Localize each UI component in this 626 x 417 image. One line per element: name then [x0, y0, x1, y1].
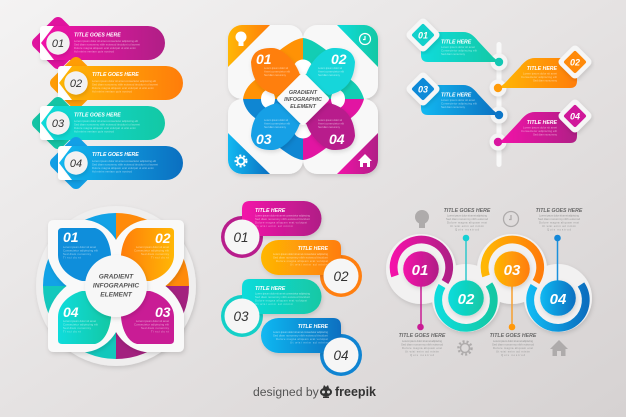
caption bottom 03: Ut wisi enim ad minim: [496, 350, 531, 354]
caption top 04: TITLE GOES HERE: [536, 208, 583, 214]
row 02: [56, 63, 183, 103]
petal labels: Consectetur adipiscing elit: [63, 322, 98, 326]
petal labels: Consectetur adipiscing elit: [134, 248, 169, 252]
flag 02: [494, 50, 587, 92]
row 04: 04: [333, 348, 349, 363]
flag 04: TITLE HERE: [527, 120, 558, 126]
row 04: [56, 143, 183, 183]
icon: home: [358, 154, 372, 167]
flag 02: Sed diam nonummy: [533, 78, 558, 82]
row 01: TITLE GOES HERE: [74, 32, 121, 38]
row 04: Sed diam nonummy nibh euismod tincidunt ut laoreet: [92, 162, 158, 166]
caption top 04: Dolore magna aliquam erat: [539, 220, 579, 224]
centre circle: [85, 255, 147, 317]
row 01: [38, 23, 165, 63]
row 02: Dolore magna aliquam erat volutpat: [276, 259, 328, 263]
row 04: Ad minim veniam quis nostrud: [92, 170, 132, 174]
icon: clock: [504, 212, 518, 226]
ring 04: [530, 235, 586, 328]
row 01: TITLE HERE: [255, 208, 286, 214]
flag 04: Consectetur adipiscing elit: [521, 129, 557, 133]
lobe labels: [256, 51, 347, 147]
lobe labels: Amet consectetur elit: [264, 122, 290, 126]
petal labels: Tincidunt: [151, 330, 169, 334]
ring 03: [485, 240, 540, 330]
row 03: 03: [52, 118, 65, 130]
row 03: Sed diam nonummy nibh euismod tincidunt: [255, 295, 310, 299]
row 04: Dolore magna aliquam erat volutpat ut wisi enim: [92, 166, 155, 170]
row 01: Dolore magna aliquam erat volutpat ut wisi enim: [74, 46, 137, 50]
petal labels: 03: [155, 304, 171, 320]
row 03: Dolore magna aliquam erat volutpat: [255, 298, 307, 302]
caption top 02: TITLE GOES HERE: [444, 208, 491, 214]
centre diamond: INFOGRAPHIC: [284, 97, 322, 103]
row 02: 02: [333, 269, 349, 284]
row 01: Ut wisi enim ad minim: [255, 224, 294, 228]
flag 03: Sed diam nonummy: [441, 105, 466, 109]
colour petals: [58, 228, 174, 344]
flag 03: [411, 77, 503, 119]
row 01: [221, 201, 322, 258]
petal labels: Tincidunt: [63, 256, 81, 260]
row 02: Lorem ipsum dolor sit amet consectetur adipiscing elit: [92, 79, 156, 83]
row 04: Ut wisi enim ad minim: [290, 340, 329, 344]
flag 04: Lorem ipsum dolor sit amet: [523, 126, 557, 130]
panel: round petal graphic bottom left: [36, 206, 196, 366]
row 04: Sed diam nonummy nibh euismod tincidunt: [273, 334, 328, 338]
ring 03: 03: [504, 262, 521, 279]
petal labels: Lorem ipsum dolor sit amet: [63, 319, 96, 323]
lobe labels: Lorem ipsum dolor sit: [264, 66, 288, 70]
panel: square clover top centre: [228, 25, 378, 174]
lobe labels: 01: [256, 51, 272, 67]
icon: home: [550, 340, 568, 356]
row 01: Lorem ipsum dolor sit amet consectetur adipiscing: [255, 214, 310, 218]
row 01: Dolore magna aliquam erat volutpat: [255, 220, 307, 224]
petal labels: Tincidunt: [151, 256, 169, 260]
caption bottom 03: Quis nostrud: [501, 353, 525, 357]
row 03: Lorem ipsum dolor sit amet consectetur adipiscing elit: [74, 119, 138, 123]
row 01: Sed diam nonummy nibh euismod tincidunt ut laoreet: [74, 42, 140, 46]
centre circle: ELEMENT: [100, 292, 133, 298]
ring 02: [438, 235, 494, 328]
colour ring quadrants: [43, 213, 189, 359]
caption bottom 01: Sed diam nonummy nibh euismod: [401, 342, 443, 346]
row 03: [221, 279, 322, 337]
row 03: Sed diam nonummy nibh euismod tincidunt ut laoreet: [74, 122, 140, 126]
flag 03: TITLE HERE: [441, 92, 472, 98]
row 03: Ut wisi enim ad minim: [255, 302, 294, 306]
flag 02: TITLE HERE: [527, 66, 558, 72]
ring 01: [394, 240, 449, 330]
icon: bulb: [415, 210, 429, 228]
caption bottom 01: Dolore magna aliquam erat: [402, 346, 442, 350]
centre diamond: [280, 76, 326, 122]
row 04: 04: [70, 158, 82, 170]
petal labels: Lorem ipsum dolor sit amet: [136, 319, 169, 323]
caption bottom 03: Sed diam nonummy nibh euismod: [492, 342, 534, 346]
flag 02: Consectetur adipiscing elit: [521, 75, 557, 79]
node halos: [490, 54, 508, 150]
vertical bar: [496, 42, 502, 167]
row 03: TITLE HERE: [255, 286, 286, 292]
icon: gear: [458, 342, 472, 354]
row 01: Ad minim veniam quis nostrud: [74, 50, 114, 54]
lobe labels: Lorem ipsum dolor sit: [264, 118, 288, 122]
row 02: TITLE GOES HERE: [92, 72, 139, 78]
flag 03: Consectetur adipiscing elit: [441, 102, 477, 106]
panel: pills with rings bottom centre: [221, 201, 362, 376]
row 04: TITLE HERE: [298, 324, 329, 330]
row 04: Lorem ipsum dolor sit amet consectetur adipiscing: [273, 330, 328, 334]
panel: timeline flags top right: [411, 23, 587, 167]
petal labels: Lorem ipsum dolor sit amet: [63, 245, 96, 249]
row 03: 03: [233, 309, 249, 324]
row 03: Ad minim veniam quis nostrud: [74, 130, 114, 134]
lobe labels: 03: [256, 131, 272, 147]
footer credit: freepik: [335, 385, 376, 399]
panel: stacked pills top left: [38, 23, 183, 183]
caption bottom 03: [490, 333, 537, 357]
petal labels: Sed diam nonummy: [63, 326, 92, 330]
caption top 04: Ut wisi enim ad minim: [542, 224, 577, 228]
row 01: 01: [233, 230, 249, 245]
lobe labels: Amet consectetur elit: [264, 70, 290, 74]
flag 04: Sed diam nonummy: [533, 132, 558, 136]
icon: clock: [360, 34, 370, 44]
row 03: Lorem ipsum dolor sit amet consectetur adipiscing: [255, 292, 310, 296]
row 02: TITLE HERE: [298, 246, 329, 252]
flag 02: 02: [570, 58, 580, 68]
centre circle: GRADIENT: [99, 274, 134, 280]
caption bottom 03: TITLE GOES HERE: [490, 333, 537, 339]
lobe labels: Lorem ipsum dolor sit: [318, 66, 342, 70]
flag 01: [411, 23, 503, 66]
row 01: 01: [52, 38, 64, 50]
petal labels: Sed diam nonummy: [63, 252, 92, 256]
petal labels: Lorem ipsum dolor sit amet: [136, 245, 169, 249]
caption bottom 01: [399, 333, 446, 357]
caption bottom 01: Lorem ipsum dolor sit amet adipiscing: [402, 339, 442, 343]
flag 01: Sed diam nonummy: [441, 52, 466, 56]
caption bottom 01: TITLE GOES HERE: [399, 333, 446, 339]
petal labels: Consectetur adipiscing elit: [134, 322, 169, 326]
row 03: [38, 103, 165, 143]
caption top 02: Sed diam nonummy nibh euismod: [446, 217, 488, 221]
row 04: [261, 318, 362, 376]
footer credit: designed by: [253, 385, 320, 399]
flag 02: Lorem ipsum dolor sit amet: [523, 72, 557, 76]
flag 03: Lorem ipsum dolor sit amet: [441, 98, 475, 102]
flag 04: 04: [570, 112, 580, 122]
petal labels: Sed diam nonummy: [141, 252, 170, 256]
lobe labels: Amet consectetur elit: [318, 122, 344, 126]
flag 03: 03: [418, 84, 428, 94]
caption top 04: Sed diam nonummy nibh euismod: [538, 217, 580, 221]
row 02: Lorem ipsum dolor sit amet consectetur adipiscing: [273, 252, 328, 256]
back petals: [243, 38, 364, 160]
petal labels: 01: [63, 229, 79, 245]
lobe labels: Sed diam nonummy: [264, 125, 287, 129]
row 04: Lorem ipsum dolor sit amet consectetur adipiscing elit: [92, 159, 156, 163]
icon: freepik mascot: [320, 385, 332, 398]
caption top 04: Lorem ipsum dolor sit amet adipiscing: [539, 214, 579, 218]
petal labels: Consectetur adipiscing elit: [63, 248, 98, 252]
row 03: TITLE GOES HERE: [74, 112, 121, 118]
flag 01: 01: [418, 30, 428, 40]
flag 01: Consectetur adipiscing elit: [441, 48, 477, 52]
icon: gear: [236, 156, 246, 166]
caption top 02: Quis nostrud: [455, 228, 479, 232]
lobe labels: Sed diam nonummy: [264, 73, 287, 77]
centre diamond: GRADIENT: [289, 90, 318, 96]
caption top 02: Ut wisi enim ad minim: [450, 224, 485, 228]
lobe labels: Sed diam nonummy: [318, 73, 341, 77]
ring 04: 04: [550, 291, 567, 308]
row 02: Ut wisi enim ad minim: [290, 262, 329, 266]
caption bottom 03: Dolore magna aliquam erat: [493, 346, 533, 350]
lobe labels: Sed diam nonummy: [318, 125, 341, 129]
row 02: 02: [70, 78, 82, 90]
petal labels: [63, 229, 171, 334]
row 02: Ad minim veniam quis nostrud: [92, 90, 132, 94]
row 04: TITLE GOES HERE: [92, 152, 139, 158]
caption bottom 01: Quis nostrud: [410, 353, 434, 357]
row 02: Sed diam nonummy nibh euismod tincidunt: [273, 256, 328, 260]
row 02: Dolore magna aliquam erat volutpat ut wisi enim: [92, 86, 155, 90]
flag 01: TITLE HERE: [441, 40, 472, 46]
petal labels: 04: [63, 304, 79, 320]
caption top 02: [444, 208, 491, 232]
petal labels: Tincidunt: [63, 330, 81, 334]
flag 04: [494, 104, 587, 146]
row 01: Sed diam nonummy nibh euismod tincidunt: [255, 217, 310, 221]
lobe labels: 04: [329, 131, 345, 147]
row 02: Sed diam nonummy nibh euismod tincidunt ut laoreet: [92, 82, 158, 86]
petal labels: 02: [155, 230, 171, 246]
centre diamond: ELEMENT: [290, 104, 317, 110]
corner triangles: [228, 25, 378, 174]
caption top 04: Quis nostrud: [547, 228, 571, 232]
flag 01: Lorem ipsum dolor sit amet: [441, 45, 475, 49]
white petals: [48, 220, 184, 352]
ring 02: 02: [458, 291, 475, 308]
row 03: Dolore magna aliquam erat volutpat ut wisi enim: [74, 126, 137, 130]
caption bottom 01: Ut wisi enim ad minim: [405, 350, 440, 354]
lobe labels: Lorem ipsum dolor sit: [318, 118, 342, 122]
row 01: Lorem ipsum dolor sit amet consectetur adipiscing elit: [74, 39, 138, 43]
ring 01: 01: [412, 262, 428, 279]
icon: bulb: [236, 32, 246, 46]
caption top 04: [536, 208, 583, 232]
row 04: Dolore magna aliquam erat volutpat: [276, 337, 328, 341]
caption top 02: Dolore magna aliquam erat: [447, 220, 487, 224]
caption top 02: Lorem ipsum dolor sit amet adipiscing: [447, 214, 487, 218]
front lobes: [251, 48, 355, 150]
petal labels: Sed diam nonummy: [141, 326, 170, 330]
caption bottom 03: Lorem ipsum dolor sit amet adipiscing: [493, 339, 533, 343]
halos: [386, 234, 592, 332]
centre circle: INFOGRAPHIC: [93, 282, 139, 290]
outer disc: [36, 206, 196, 366]
lobe labels: Amet consectetur elit: [318, 70, 344, 74]
panel: linked rings bottom right: [386, 208, 592, 357]
footer credit: [253, 385, 376, 399]
lobe labels: 02: [331, 51, 347, 67]
row 02: [261, 240, 362, 297]
